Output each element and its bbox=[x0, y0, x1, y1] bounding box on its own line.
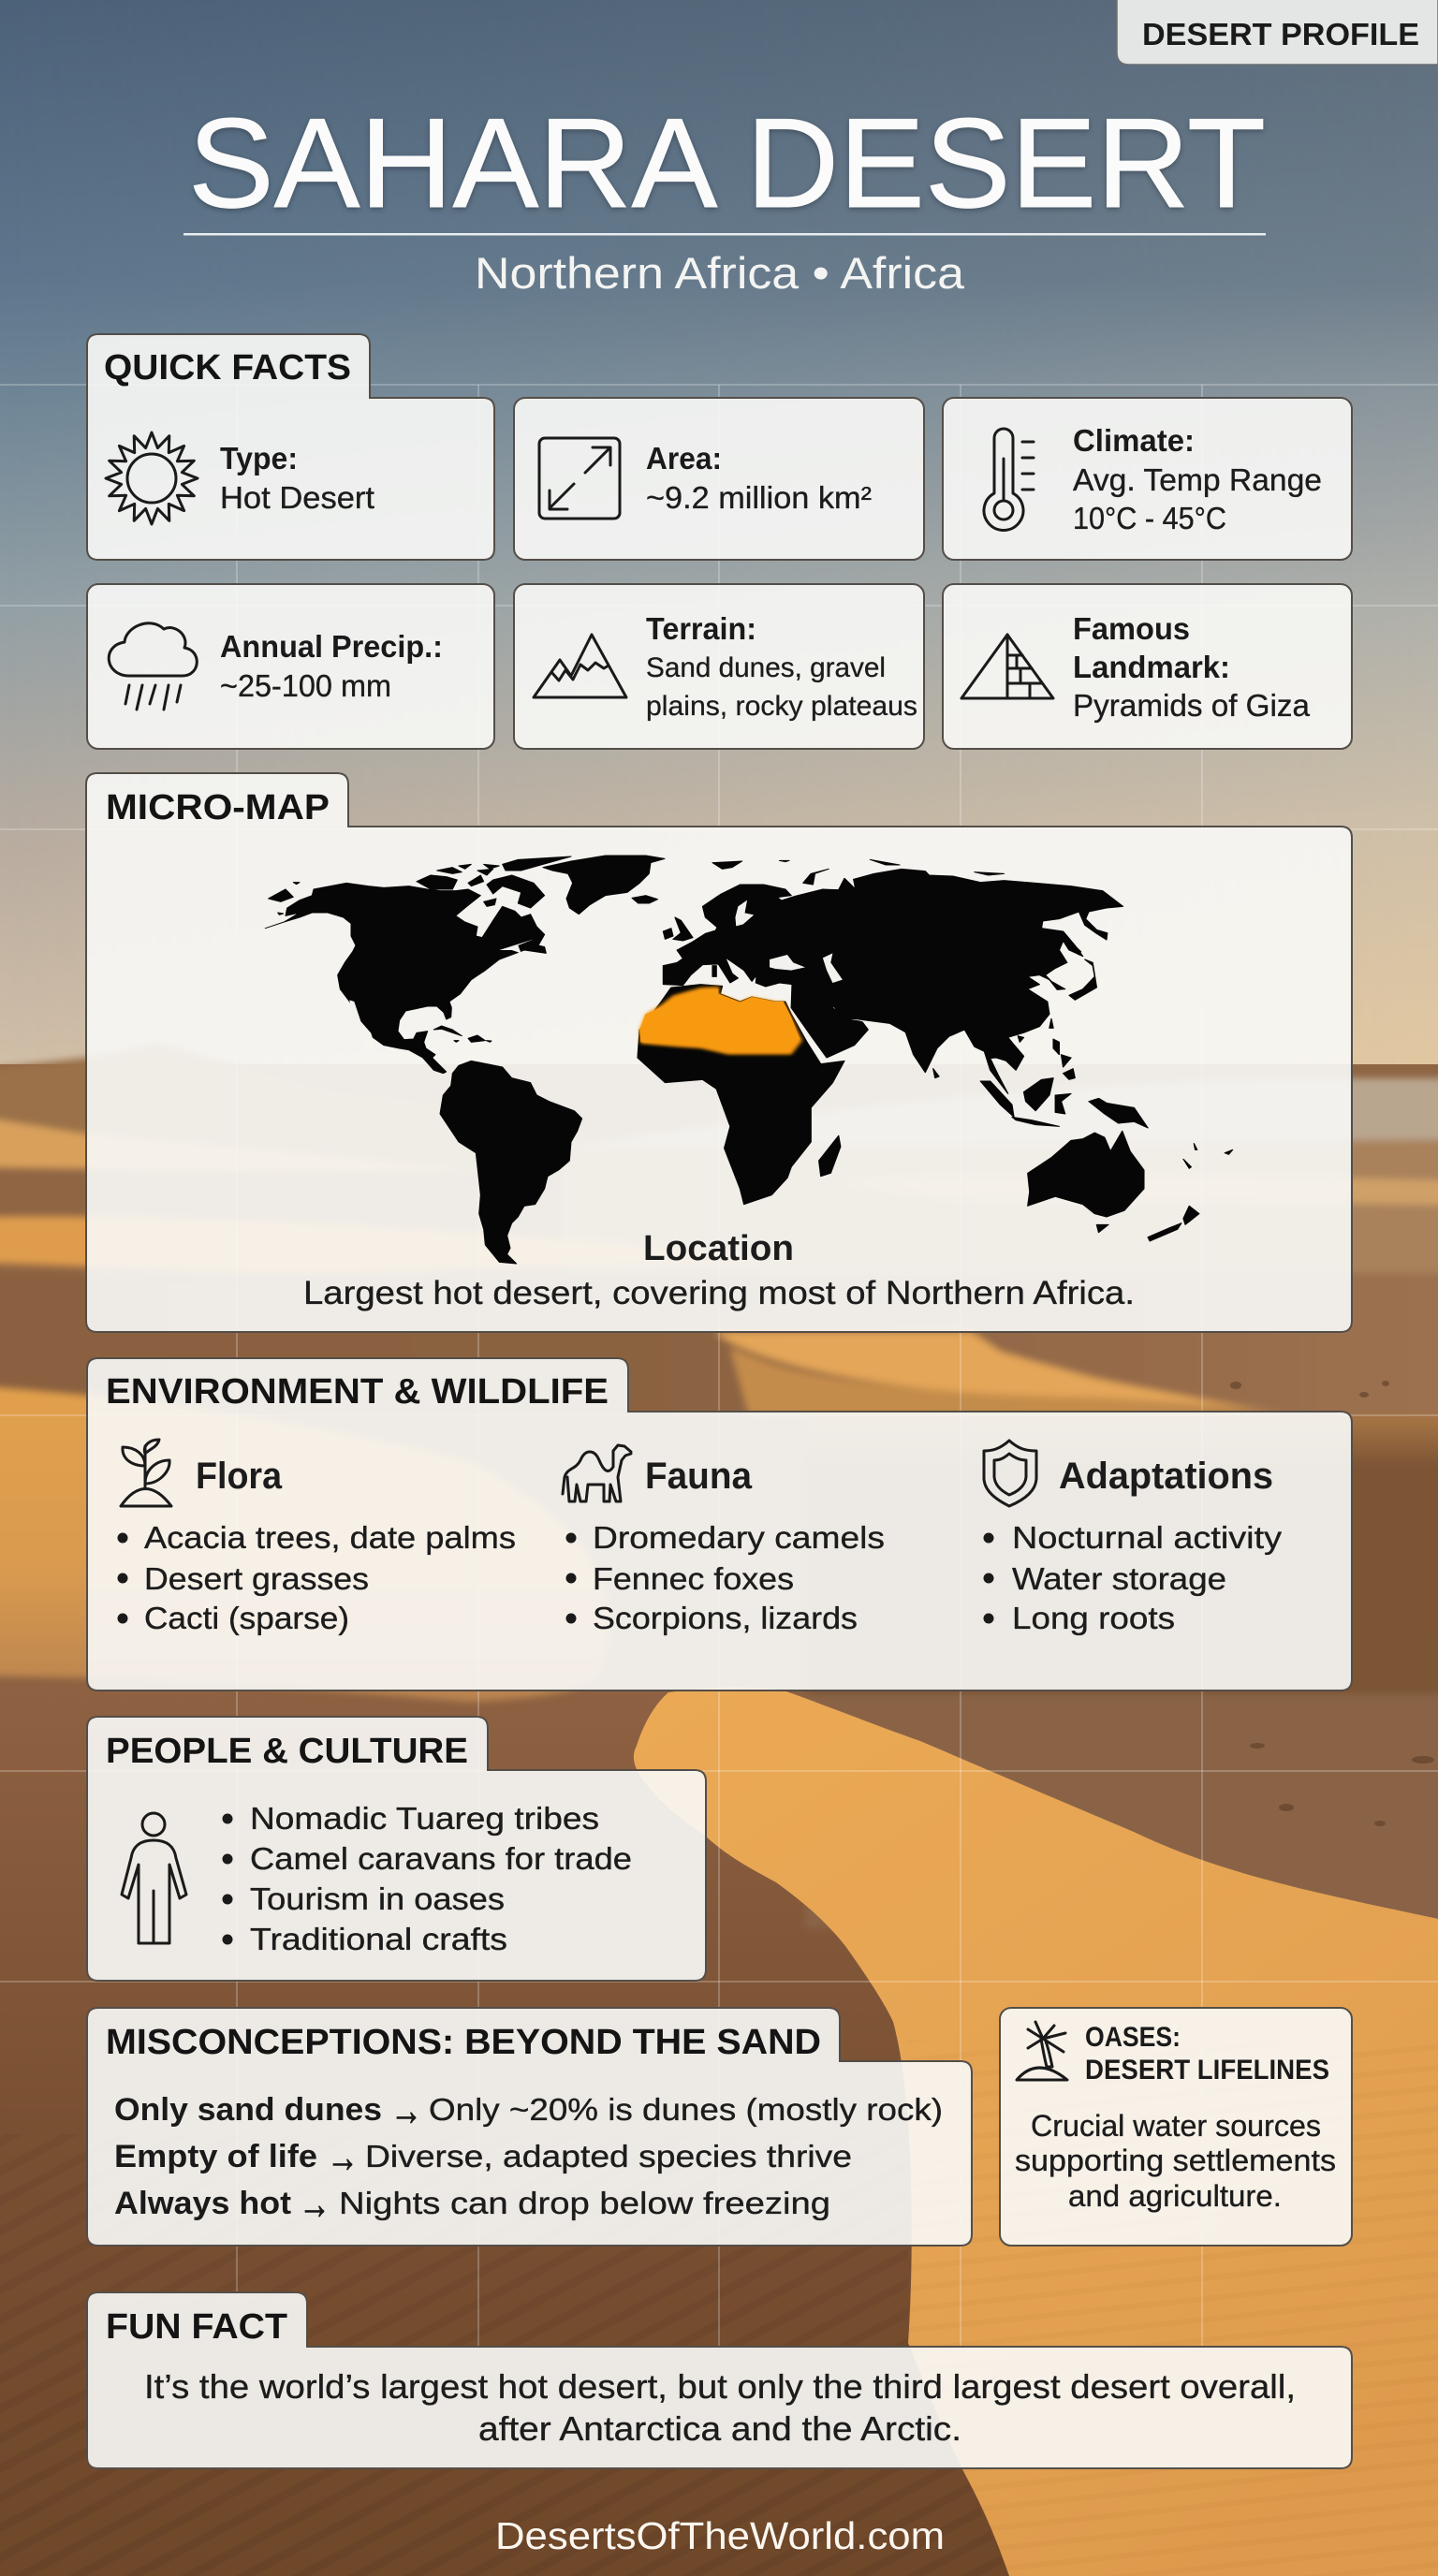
text: area bbox=[646, 441, 872, 515]
heading: micro-map: MICRO-MAP bbox=[106, 788, 330, 827]
text: fun fact: after Antarctica and the Arctic. bbox=[478, 2409, 961, 2448]
tag: desert profile bbox=[1117, 0, 1438, 65]
panel: terrain card bbox=[514, 584, 924, 749]
misconception: always hot: Always hot bbox=[114, 2186, 291, 2221]
misconception: empty of life bbox=[114, 2132, 852, 2181]
list: adaptations: Long roots bbox=[1012, 1601, 1175, 1635]
misconception: only sand dunes: → bbox=[390, 2086, 422, 2134]
heading: quick facts: QUICK FACTS bbox=[104, 348, 351, 388]
text: oases description: supporting settlements bbox=[1015, 2144, 1336, 2177]
text: fun fact: It’s the world’s largest hot desert, but only the third largest desert overall, bbox=[144, 2367, 1296, 2406]
text: annual precipitation: Annual Precip.: bbox=[220, 629, 443, 664]
map caption: location: Largest hot desert, covering most of Northern Africa. bbox=[303, 1275, 1135, 1311]
column: adaptations bbox=[983, 1441, 1283, 1635]
misconception: empty of life: → bbox=[327, 2132, 359, 2181]
text: terrain: Terrain: bbox=[646, 611, 756, 646]
panel: landmark card bbox=[943, 584, 1352, 749]
icon: pyramid bbox=[961, 635, 1053, 698]
misconception: always hot bbox=[114, 2179, 830, 2228]
heading: adaptations: Adaptations bbox=[1059, 1456, 1273, 1497]
text: annual precipitation: ~25-100 mm bbox=[220, 668, 391, 703]
text: fun fact bbox=[144, 2367, 1296, 2448]
list: people and culture: Camel caravans for trade bbox=[250, 1841, 632, 1876]
panel: fun fact bbox=[87, 2292, 1352, 2468]
text: famous landmark bbox=[1073, 611, 1311, 723]
text: area: ~9.2 million km² bbox=[646, 480, 872, 515]
text: type: Hot Desert bbox=[220, 480, 374, 515]
icon: plant bbox=[121, 1440, 171, 1506]
panel: area card bbox=[514, 398, 924, 560]
text: area: Area: bbox=[646, 441, 722, 476]
misconception: always hot: → bbox=[299, 2179, 330, 2228]
icon: mountains bbox=[534, 635, 626, 697]
text: oases description: and agriculture. bbox=[1068, 2179, 1282, 2213]
text: famous landmark: Pyramids of Giza bbox=[1073, 688, 1311, 723]
column: fauna bbox=[563, 1445, 885, 1635]
text: type bbox=[220, 441, 374, 515]
list: fauna: Dromedary camels bbox=[593, 1520, 885, 1555]
icon: shield bbox=[984, 1441, 1036, 1506]
text: terrain: Sand dunes, gravel bbox=[646, 652, 886, 683]
list: people and culture: Traditional crafts bbox=[250, 1922, 507, 1956]
list: fauna: Scorpions, lizards bbox=[593, 1601, 858, 1635]
text: climate: 10°C - 45°C bbox=[1073, 501, 1226, 535]
misconception: only sand dunes bbox=[114, 2086, 943, 2134]
misconception: always hot: Nights can drop below freezing bbox=[339, 2186, 830, 2220]
panel: misconceptions bbox=[87, 2008, 972, 2246]
list: people and culture: Nomadic Tuareg tribes bbox=[250, 1801, 599, 1836]
heading: fun fact: FUN FACT bbox=[106, 2307, 287, 2347]
text: famous landmark: Landmark: bbox=[1073, 650, 1230, 684]
icon: rain cloud bbox=[109, 623, 197, 710]
panel: quick facts type card with tab bbox=[87, 334, 494, 560]
text: annual precipitation bbox=[220, 629, 443, 703]
heading: misconceptions: MISCONCEPTIONS: BEYOND THE SAND bbox=[106, 2023, 821, 2062]
subtitle: Northern Africa • Africa bbox=[475, 248, 965, 298]
world map bbox=[265, 856, 1233, 1264]
map: sahara highlight bbox=[639, 987, 802, 1055]
heading: people and culture: PEOPLE & CULTURE bbox=[106, 1732, 468, 1771]
list: adaptations bbox=[983, 1520, 1283, 1635]
map caption: location bbox=[303, 1229, 1135, 1311]
panel: precipitation card bbox=[87, 584, 494, 749]
text: oases description: Crucial water sources bbox=[1031, 2109, 1321, 2143]
title rule bbox=[183, 233, 1266, 236]
list: flora: Desert grasses bbox=[144, 1561, 369, 1596]
heading: oases bbox=[1085, 2022, 1329, 2086]
panel: micro-map bbox=[86, 773, 1352, 1332]
heading: oases: OASES: bbox=[1085, 2022, 1181, 2053]
list: adaptations: Water storage bbox=[1012, 1561, 1226, 1596]
list: flora bbox=[118, 1520, 516, 1635]
icon: thermometer bbox=[984, 429, 1034, 530]
text: famous landmark: Famous bbox=[1073, 611, 1190, 646]
column: flora bbox=[118, 1440, 516, 1635]
panel: climate card bbox=[943, 398, 1352, 560]
text: climate bbox=[1073, 423, 1322, 535]
list: fauna: Fennec foxes bbox=[593, 1561, 794, 1596]
misconception: empty of life: Empty of life bbox=[114, 2139, 317, 2174]
panel: environment and wildlife bbox=[87, 1358, 1352, 1690]
heading: oases: DESERT LIFELINES bbox=[1085, 2055, 1329, 2086]
footer: website: DesertsOfTheWorld.com bbox=[495, 2514, 945, 2557]
list: adaptations: Nocturnal activity bbox=[1012, 1520, 1283, 1555]
text: terrain bbox=[646, 611, 917, 722]
map caption: location: Location bbox=[643, 1229, 794, 1268]
text: type: Type: bbox=[220, 441, 298, 476]
tag: desert profile: DESERT PROFILE bbox=[1142, 17, 1419, 51]
panel: oases bbox=[1000, 2008, 1352, 2246]
title: SAHARA DESERT bbox=[188, 92, 1266, 234]
panel: people and culture bbox=[87, 1717, 706, 1981]
list: people and culture: Tourism in oases bbox=[250, 1881, 505, 1916]
text: climate: Climate: bbox=[1073, 423, 1195, 458]
icon: camel bbox=[563, 1445, 631, 1501]
icon: person bbox=[122, 1813, 186, 1943]
icon: palm island bbox=[1017, 2022, 1067, 2080]
list: flora: Cacti (sparse) bbox=[144, 1601, 349, 1635]
text: oases description bbox=[1015, 2109, 1336, 2213]
list: flora: Acacia trees, date palms bbox=[144, 1520, 516, 1555]
text: terrain: plains, rocky plateaus bbox=[646, 691, 917, 722]
heading: flora: Flora bbox=[196, 1456, 283, 1497]
heading: environment and wildlife: ENVIRONMENT & WILDLIFE bbox=[106, 1372, 609, 1412]
map: americas and greenland bbox=[265, 856, 665, 1264]
misconception: empty of life: Diverse, adapted species thrive bbox=[365, 2139, 852, 2174]
text: climate: Avg. Temp Range bbox=[1073, 462, 1322, 497]
misconception: only sand dunes: Only sand dunes bbox=[114, 2092, 382, 2128]
icon: area arrows bbox=[539, 438, 620, 519]
list: fauna bbox=[565, 1520, 885, 1635]
icon: sun bbox=[106, 432, 198, 524]
list: people and culture bbox=[223, 1801, 632, 1956]
misconception: only sand dunes: Only ~20% is dunes (mostly rock) bbox=[429, 2092, 943, 2127]
heading: fauna: Fauna bbox=[645, 1456, 753, 1497]
map: eurasia, africa, oceania bbox=[638, 859, 1233, 1241]
